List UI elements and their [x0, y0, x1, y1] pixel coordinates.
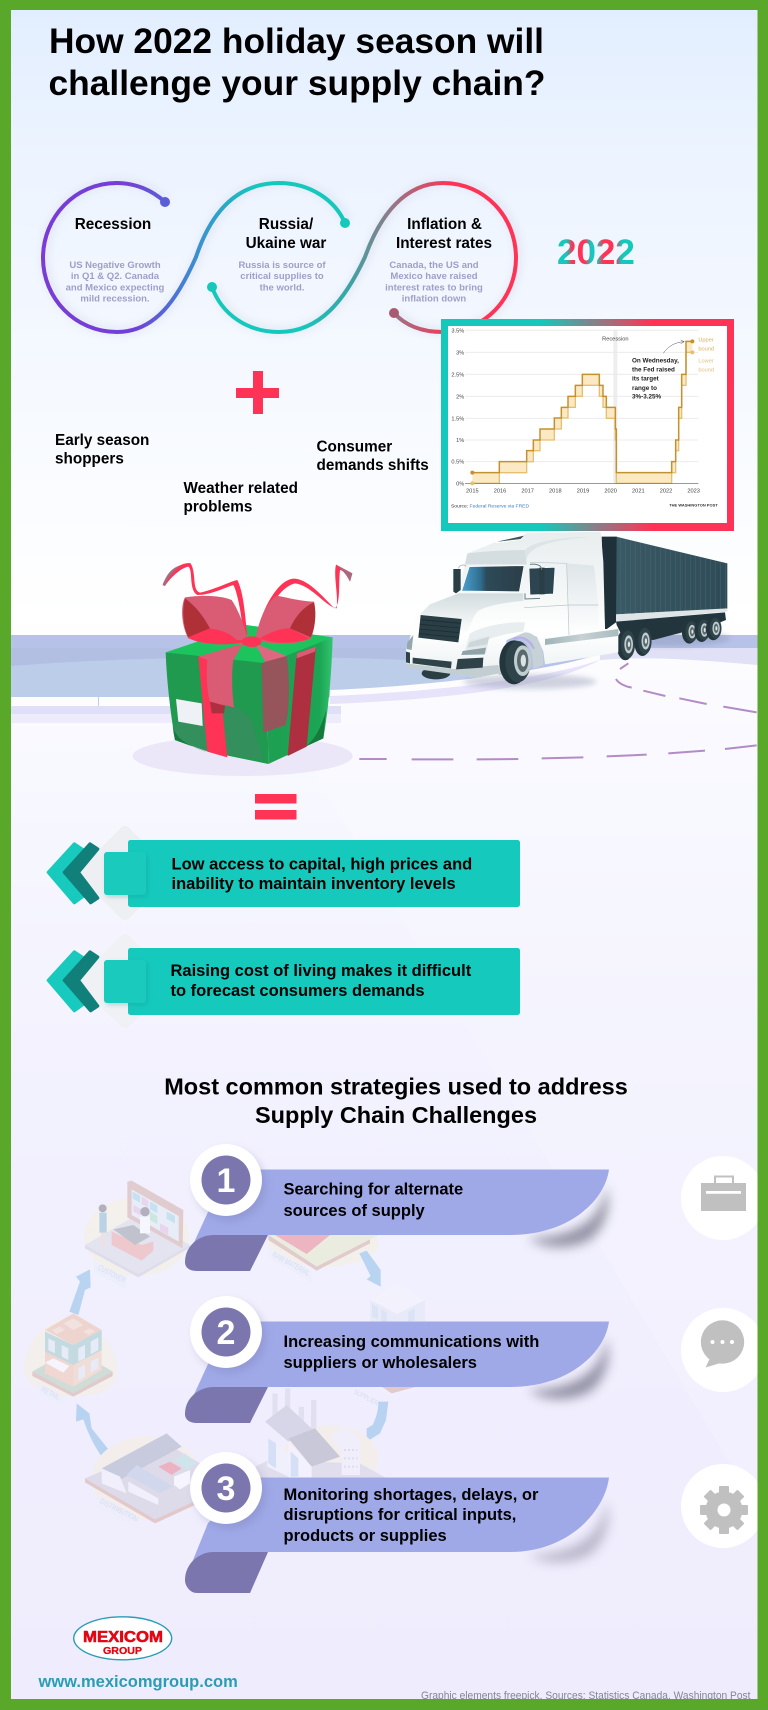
lower bound line — [472, 352, 692, 483]
callout text: to forecast consumers demands — [170, 982, 424, 1000]
icon: briefcase — [681, 1156, 765, 1240]
recession text: and Mexico expecting — [66, 282, 165, 294]
year 2022: 2022 — [557, 233, 635, 272]
recession label: Recession — [602, 337, 629, 343]
factory — [256, 1388, 385, 1492]
chart source — [451, 503, 718, 509]
recession text: Recession — [75, 216, 151, 233]
bound labels: Upper — [698, 337, 714, 343]
ribbon text: Increasing communications with — [284, 1333, 539, 1351]
x axis labels: 2019 — [577, 488, 589, 494]
raw material farm: RAW MATERIAL — [271, 1250, 312, 1278]
gift label — [176, 699, 203, 726]
grille — [418, 615, 462, 642]
headlights and bumper — [406, 635, 489, 669]
truck shadow — [463, 674, 597, 689]
title: challenge your supply chain? — [48, 64, 546, 103]
russia ukraine text: Russia/ — [259, 216, 314, 233]
loop end dots — [160, 197, 399, 318]
arrow: supplier to factory — [367, 1402, 388, 1442]
x axis labels: 2018 — [549, 488, 562, 494]
icon: gear — [681, 1464, 765, 1548]
retail building — [24, 1313, 117, 1407]
bound labels: bound — [698, 347, 714, 353]
loop: russia ukraine stroke — [196, 183, 345, 257]
truck — [406, 532, 730, 689]
gift shadow — [133, 736, 353, 776]
y axis labels — [451, 328, 464, 487]
faded supply chain cycle illustration — [24, 1181, 425, 1528]
y axis labels: 2.5% — [451, 373, 464, 379]
number badge: 1 — [217, 1162, 235, 1200]
ribbon shadow — [528, 1500, 608, 1562]
y axis labels: 1% — [456, 438, 464, 444]
title — [48, 22, 546, 103]
number badge: 3 — [217, 1470, 235, 1508]
bow streamer left — [163, 563, 247, 635]
callout chevrons — [48, 952, 98, 1011]
infinity loop diagram — [43, 182, 518, 332]
y axis labels: 3% — [456, 351, 464, 357]
russia ukraine text: Russia is source of — [238, 260, 326, 271]
front wheel — [499, 640, 531, 684]
arrow: distribution to retail — [76, 1403, 112, 1462]
chart annotation: On Wednesday, — [632, 358, 679, 365]
rate band fill — [472, 341, 692, 483]
arrow: raw material to supplier — [359, 1251, 381, 1287]
strategy 3 ribbon — [185, 1452, 609, 1593]
mexicom group logo — [74, 1617, 172, 1660]
gift faces — [166, 625, 333, 764]
inflation text: inflation down — [402, 294, 466, 304]
number badge — [190, 1144, 266, 1221]
strategy 2 ribbon — [185, 1296, 609, 1423]
callout bar — [128, 948, 520, 1015]
ribbon text: products or supplies — [284, 1527, 447, 1545]
trailer — [602, 537, 727, 640]
callout bar — [128, 840, 520, 907]
ribbon text: suppliers or wholesalers — [284, 1354, 477, 1372]
ribbon text — [284, 1333, 539, 1372]
weather related problems: problems — [184, 498, 252, 516]
x axis labels: 2015 — [466, 488, 479, 494]
chart annotation — [632, 358, 679, 401]
upper bound line — [472, 341, 692, 473]
callout square — [104, 852, 148, 897]
consumer demands shifts — [316, 438, 429, 474]
russia ukraine text — [238, 216, 326, 294]
faint light panel shape — [11, 700, 757, 1510]
retail building: RETAIL — [40, 1384, 62, 1402]
callout square — [104, 960, 148, 1005]
recession band — [613, 330, 617, 483]
bow tail right — [255, 643, 289, 733]
x axis labels: 2016 — [494, 488, 506, 494]
gift box — [133, 563, 353, 776]
ribbon fold — [185, 1387, 268, 1423]
x axis labels — [466, 488, 700, 494]
source credit: Graphic elements freepick. Sources: Statistics Canada, Washington Post — [421, 1690, 750, 1702]
ribbon shadow — [528, 1337, 608, 1399]
strategies heading: Supply Chain Challenges — [255, 1102, 537, 1128]
inflation text: Canada, the US and — [389, 260, 479, 271]
ribbon text — [284, 1486, 539, 1545]
distribution warehouse: DISTRIBUTION — [98, 1496, 140, 1523]
windshield — [462, 566, 524, 592]
russia ukraine text: Ukaine war — [246, 235, 326, 252]
bow streamer right — [256, 565, 352, 638]
arrow: retail to customer — [69, 1269, 91, 1315]
callout diamond — [76, 824, 174, 922]
mirrors — [453, 564, 545, 599]
callout text — [172, 856, 472, 893]
x axis labels: 2020 — [604, 488, 617, 494]
grid lines — [465, 330, 698, 462]
ribbon text: Searching for alternate — [284, 1180, 463, 1198]
chart source: THE WASHINGTON POST — [669, 503, 718, 508]
callout text: Low access to capital, high prices and — [172, 856, 472, 874]
x axis labels: 2023 — [687, 488, 700, 494]
chart annotation: its target — [632, 376, 660, 383]
bow knot — [242, 636, 262, 647]
inflation text: Interest rates — [396, 235, 492, 252]
distribution warehouse — [85, 1433, 233, 1528]
inflation text: interest rates to bring — [385, 282, 483, 294]
chart annotation: range to — [632, 385, 657, 392]
recession text: US Negative Growth — [69, 260, 161, 271]
weather related problems — [184, 480, 298, 516]
early season shoppers: Early season — [55, 432, 149, 449]
callout chevrons — [48, 844, 98, 903]
callout: rising cost of living — [48, 932, 520, 1030]
icon: chat bubble — [681, 1308, 765, 1392]
customer store — [84, 1181, 190, 1289]
weather related problems: Weather related — [184, 480, 298, 497]
y axis labels: 1.5% — [451, 416, 464, 422]
recession text: mild recession. — [80, 294, 150, 304]
number badge: 2 — [217, 1314, 235, 1352]
chart annotation: 3%-3.25% — [632, 394, 662, 401]
ribbon body — [185, 1170, 609, 1262]
bound labels: bound — [698, 368, 714, 374]
side window — [529, 567, 555, 595]
inflation text: Mexico have raised — [390, 271, 478, 282]
supplier label: SUPPLIER — [352, 1387, 380, 1408]
interest rate chart frame — [441, 319, 734, 531]
end point markers — [470, 339, 694, 485]
mexicom group logo: MEXICOM — [83, 1629, 163, 1646]
russia ukraine text: critical supplies to — [240, 271, 324, 282]
bow right loop — [255, 596, 315, 644]
recession text — [66, 216, 165, 304]
inflation text — [385, 216, 492, 304]
title: How 2022 holiday season will — [49, 22, 544, 61]
raw material farm — [268, 1223, 378, 1282]
ribbon text — [284, 1180, 463, 1220]
annotation arrow — [663, 340, 684, 353]
x axis labels: 2021 — [632, 488, 645, 494]
chart source: Source: Federal Reserve via FRED — [451, 503, 530, 509]
loop: recession stroke — [43, 183, 196, 332]
bow left loop — [182, 596, 248, 644]
ribbon fold — [185, 1235, 268, 1271]
trailer wheels — [617, 617, 722, 660]
mexicom group logo: GROUP — [103, 1646, 142, 1657]
callout: low access to capital — [48, 824, 520, 922]
x axis labels: 2022 — [660, 488, 672, 494]
cab details — [406, 534, 618, 678]
supplier building — [370, 1283, 425, 1393]
cab body — [406, 532, 618, 678]
callout text: Raising cost of living makes it difficult — [170, 962, 472, 980]
customer store: CUSTOMER — [96, 1263, 127, 1285]
ribbon fold — [185, 1552, 268, 1593]
number badge — [190, 1452, 266, 1529]
y axis labels: 0% — [456, 481, 464, 487]
number badge — [190, 1296, 266, 1373]
ribbon text: disruptions for critical inputs, — [284, 1506, 516, 1524]
early season shoppers: shoppers — [55, 450, 124, 468]
federal funds rate step chart — [451, 328, 718, 509]
callout text — [170, 962, 472, 1000]
recession text: in Q1 & Q2. Canada — [71, 271, 160, 282]
y axis labels: 0.5% — [451, 460, 464, 466]
bound labels — [698, 337, 714, 374]
bow tail left — [198, 643, 243, 713]
y axis labels: 3.5% — [451, 328, 464, 334]
equals sign — [255, 794, 296, 820]
website url: www.mexicomgroup.com — [38, 1673, 238, 1691]
gift ribbon bands — [198, 647, 316, 757]
chart annotation: the Fed raised — [632, 367, 675, 374]
delivery route dashes — [359, 663, 757, 759]
streamer shading — [163, 565, 352, 586]
consumer demands shifts: Consumer — [316, 438, 392, 456]
road scene background — [11, 635, 758, 723]
callout diamond — [76, 932, 174, 1030]
ribbon text: sources of supply — [284, 1202, 426, 1220]
callout text: inability to maintain inventory levels — [172, 875, 456, 893]
ribbon body — [185, 1322, 609, 1414]
ribbon shadow — [528, 1185, 608, 1247]
strategy 1 ribbon — [185, 1144, 609, 1271]
loop: inflation stroke — [212, 183, 516, 332]
x axis labels: 2017 — [521, 488, 534, 494]
axis — [465, 482, 698, 485]
ribbon text: Monitoring shortages, delays, or — [284, 1486, 539, 1504]
front hidden wheel — [422, 667, 450, 679]
plus sign — [236, 371, 279, 414]
russia ukraine text: the world. — [260, 282, 304, 294]
early season shoppers — [55, 432, 149, 468]
y axis labels: 2% — [456, 395, 464, 401]
ribbon body — [185, 1478, 609, 1580]
bound labels: Lower — [698, 358, 714, 364]
strategies heading: Most common strategies used to address — [164, 1074, 628, 1100]
inflation text: Inflation & — [407, 216, 482, 233]
strategies heading — [164, 1074, 628, 1128]
consumer demands shifts: demands shifts — [316, 457, 429, 474]
